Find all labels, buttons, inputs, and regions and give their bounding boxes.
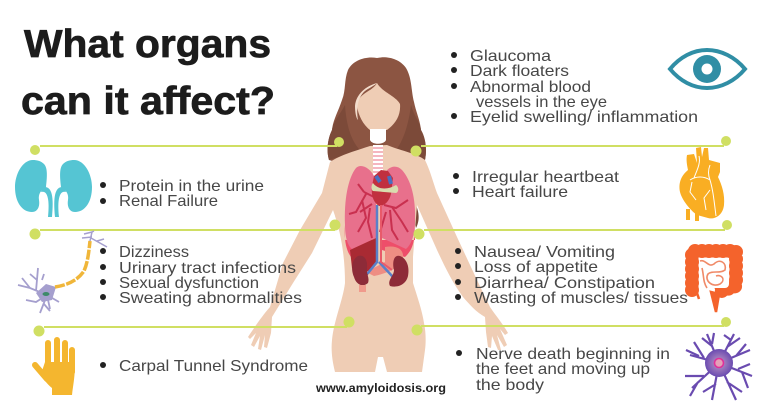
hair lock bbox=[355, 83, 377, 120]
text block: digestive: Diarrhea/ Constipation bbox=[474, 275, 655, 292]
text block: eyes: Glaucoma bbox=[470, 48, 551, 65]
title: What organs bbox=[24, 23, 271, 66]
text block: nervous system: Urinary tract infections bbox=[119, 260, 296, 277]
text block: digestive: Wasting of muscles/ tissues bbox=[474, 290, 688, 307]
icon: hand bbox=[35, 340, 75, 395]
skin bbox=[248, 145, 508, 372]
text block: kidneys bbox=[100, 178, 264, 210]
text block: eyes: Abnormal blood bbox=[470, 79, 591, 96]
text block: nerves: the feet and moving up bbox=[476, 361, 650, 378]
icon: eye bbox=[670, 50, 745, 88]
liver and stomach bbox=[350, 238, 376, 278]
title bbox=[21, 23, 275, 123]
aorta bbox=[361, 205, 393, 277]
icon: purple neuron bbox=[685, 333, 752, 400]
icon: heart bbox=[679, 147, 724, 221]
text block: eyes: vessels in the eye bbox=[476, 94, 607, 111]
text block: nervous system: Sexual dysfunction bbox=[119, 275, 259, 292]
text block: eyes: Dark floaters bbox=[470, 63, 569, 80]
hair bbox=[328, 57, 426, 165]
text block: digestive bbox=[455, 244, 688, 307]
text block: nervous system bbox=[100, 244, 302, 307]
icon: neuron bbox=[18, 231, 107, 313]
text block: nerves bbox=[456, 346, 670, 394]
text block: nervous system: Dizziness bbox=[119, 244, 189, 261]
human body figure bbox=[248, 57, 508, 372]
text block: nerves: Nerve death beginning in bbox=[476, 346, 670, 363]
heart and vessels bbox=[372, 170, 393, 206]
text block: nervous system: Sweating abnormalities bbox=[119, 290, 302, 307]
text block: heart: Heart failure bbox=[472, 184, 568, 201]
text block: hand: Carpal Tunnel Syndrome bbox=[119, 358, 308, 375]
text block: digestive: Nausea/ Vomiting bbox=[474, 244, 615, 261]
connector lines bbox=[30, 136, 732, 336]
text block: heart bbox=[453, 169, 620, 201]
icon: kidneys bbox=[15, 160, 92, 217]
text block: digestive: Loss of appetite bbox=[474, 259, 598, 276]
text block: eyes: Eyelid swelling/ inflammation bbox=[470, 109, 698, 126]
face bbox=[357, 83, 400, 130]
text block: kidneys: Renal Failure bbox=[119, 193, 218, 210]
text block: heart: Irregular heartbeat bbox=[472, 169, 620, 186]
kidneys bbox=[352, 256, 369, 285]
text block: nerves: the body bbox=[476, 377, 544, 394]
text block: kidneys: Protein in the urine bbox=[119, 178, 264, 195]
title: can it affect? bbox=[21, 80, 275, 123]
website url: www.amyloidosis.org bbox=[315, 381, 446, 395]
lungs bbox=[345, 225, 415, 257]
neck and trachea bbox=[370, 129, 386, 144]
icon: intestine bbox=[692, 251, 736, 312]
text block: eyes bbox=[451, 48, 698, 126]
